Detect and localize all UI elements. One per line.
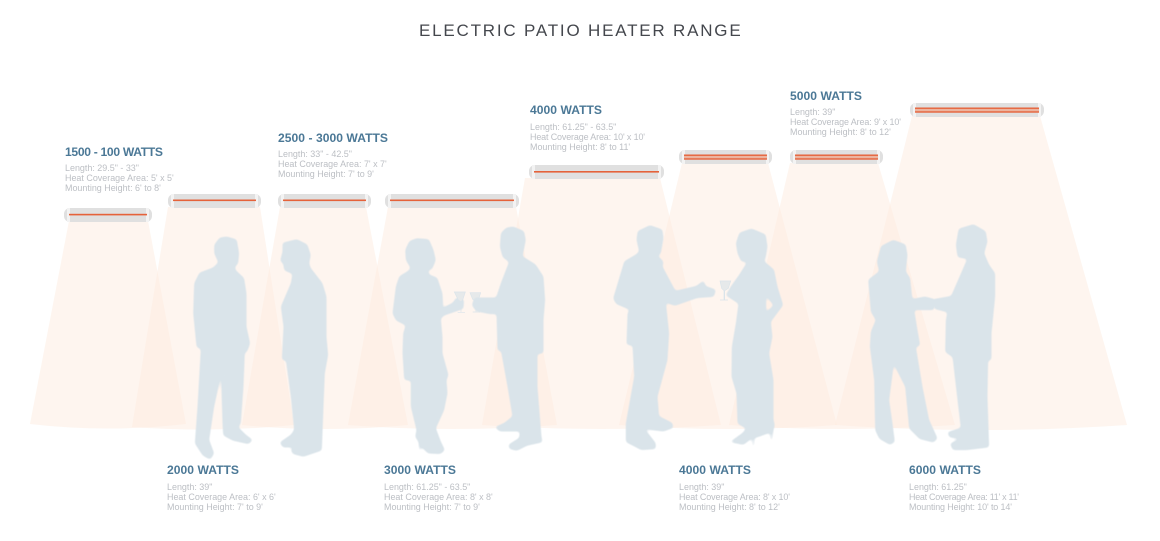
spec: 3000 watts: Heat Coverage Area: 8' x 8' [384, 492, 493, 502]
heater 1 [64, 208, 152, 222]
silhouettes: left group [194, 227, 544, 459]
spec: 2000 watts: Heat Coverage Area: 6' x 6' [167, 492, 276, 502]
spec: 5000 watts [790, 89, 901, 137]
spec: 3000 watts [384, 463, 493, 512]
person 3: woman with glass [393, 239, 463, 453]
heater 2 [168, 194, 261, 208]
spec: 4000 watts lower: 4000 WATTS [679, 463, 751, 477]
heater 7 [790, 150, 883, 164]
heater 4 [385, 194, 519, 208]
spec: 3000 watts: Length: 61.25" - 63.5" [384, 482, 470, 492]
spec: 2500 - 3000 watts [278, 131, 388, 179]
person 2 [281, 240, 327, 456]
heater 8 [910, 103, 1044, 117]
spec: 6000 watts [909, 463, 1019, 512]
person 8 [933, 225, 994, 449]
heater 6 [679, 150, 772, 164]
person 4: man with glass [473, 227, 544, 450]
spec: 2500 - 3000 watts: Heat Coverage Area: 7' x 7' [278, 159, 387, 169]
spec: 1500 - 100 watts: Mounting Height: 6' to 8' [65, 183, 161, 193]
spec: 4000 watts lower [679, 463, 790, 512]
spec: 5000 watts: Heat Coverage Area: 9' x 10' [790, 117, 901, 127]
heater 5 [529, 165, 664, 179]
spec: 1500 - 100 watts: 1500 - 100 WATTS [65, 145, 163, 159]
spec: 6000 watts: 6000 WATTS [909, 463, 981, 477]
spec: 6000 watts: Mounting Height: 10' to 14' [909, 502, 1012, 512]
wine glass [454, 292, 465, 312]
spec: 4000 watts lower: Heat Coverage Area: 8' x 10' [679, 492, 790, 502]
person 6: woman with glass [727, 229, 782, 446]
heater 3 [278, 194, 371, 208]
person 7 [869, 241, 937, 444]
spec: 4000 watts upper: Heat Coverage Area: 10' x 10' [530, 132, 645, 142]
spec: 2000 watts: Length: 39" [167, 482, 212, 492]
wine glass [470, 293, 481, 312]
spec: 4000 watts lower: Mounting Height: 8' to 12' [679, 502, 780, 512]
spec: 2500 - 3000 watts: 2500 - 3000 WATTS [278, 131, 388, 145]
spec: 5000 watts: 5000 WATTS [790, 89, 862, 103]
spec: 2000 watts: 2000 WATTS [167, 463, 239, 477]
spec: 6000 watts: Length: 61.25" [909, 482, 967, 492]
spec: 2000 watts: Mounting Height: 7' to 9' [167, 502, 263, 512]
title: ELECTRIC PATIO HEATER RANGE [419, 21, 742, 40]
spec: 4000 watts upper: 4000 WATTS [530, 103, 602, 117]
spec: 4000 watts upper: Length: 61.25" - 63.5" [530, 122, 616, 132]
spec: 2000 watts [167, 463, 276, 512]
spec: 3000 watts: Mounting Height: 7' to 9' [384, 502, 480, 512]
spec: 1500 - 100 watts: Length: 29.5" - 33" [65, 163, 139, 173]
heat cones [30, 116, 1127, 430]
spec: 4000 watts upper: Mounting Height: 8' to 11' [530, 142, 630, 152]
person 1 [194, 237, 252, 459]
spec: 4000 watts lower: Length: 39" [679, 482, 724, 492]
spec: 1500 - 100 watts: Heat Coverage Area: 5' x 5' [65, 173, 174, 183]
spec: 4000 watts upper [530, 103, 645, 152]
person 5 [614, 226, 715, 449]
spec: 3000 watts: 3000 WATTS [384, 463, 456, 477]
wine glass [720, 281, 731, 300]
spec: 5000 watts: Length: 39" [790, 107, 835, 117]
spec: 2500 - 3000 watts: Length: 33" - 42.5" [278, 149, 352, 159]
silhouettes: right group [614, 225, 994, 449]
spec: 5000 watts: Mounting Height: 8' to 12' [790, 127, 891, 137]
spec: 1500 - 100 watts [65, 145, 174, 193]
spec: 2500 - 3000 watts: Mounting Height: 7' to 9' [278, 169, 374, 179]
spec: 6000 watts: Heat Coverage Area: 11' x 11' [909, 492, 1019, 502]
